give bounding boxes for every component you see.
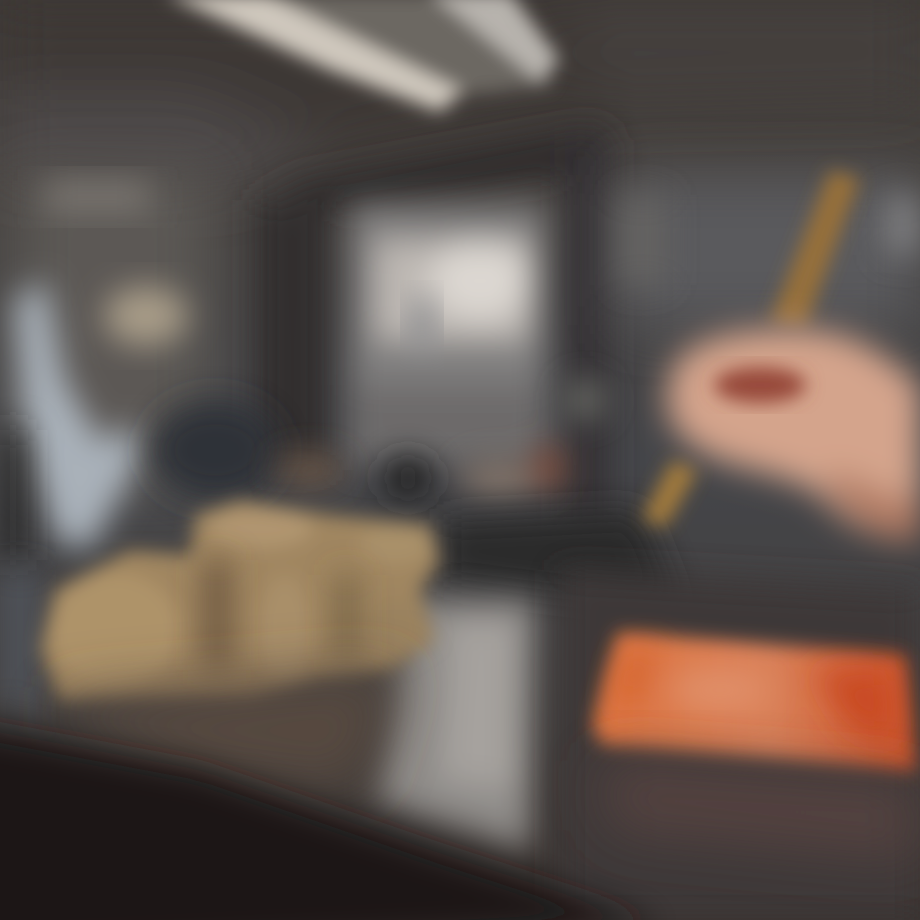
food pile	[40, 500, 440, 700]
dark figures by counter	[0, 400, 434, 560]
window figure	[410, 300, 434, 350]
dark beam and pillars	[255, 125, 620, 530]
dark counter band	[440, 510, 680, 610]
left wall sign	[45, 180, 150, 214]
left wall area	[15, 170, 210, 490]
right wall panel	[620, 175, 920, 325]
floor reflection	[375, 600, 535, 850]
orange card	[592, 632, 916, 772]
window	[350, 205, 545, 465]
hand	[667, 328, 920, 541]
foreground black counter	[0, 725, 660, 920]
cream lamp	[104, 286, 188, 346]
pale blue figure	[14, 280, 140, 550]
right wall highlights	[620, 195, 920, 285]
right counter surface	[560, 570, 920, 920]
pencil	[642, 170, 860, 528]
lower counter	[0, 570, 40, 720]
ceiling light strip	[165, 0, 560, 112]
food shadows	[205, 560, 356, 670]
counter items	[275, 380, 605, 496]
card reflection	[600, 760, 920, 860]
fingernail shadow	[714, 367, 806, 403]
food reflection	[60, 670, 400, 790]
ceiling	[0, 0, 920, 190]
